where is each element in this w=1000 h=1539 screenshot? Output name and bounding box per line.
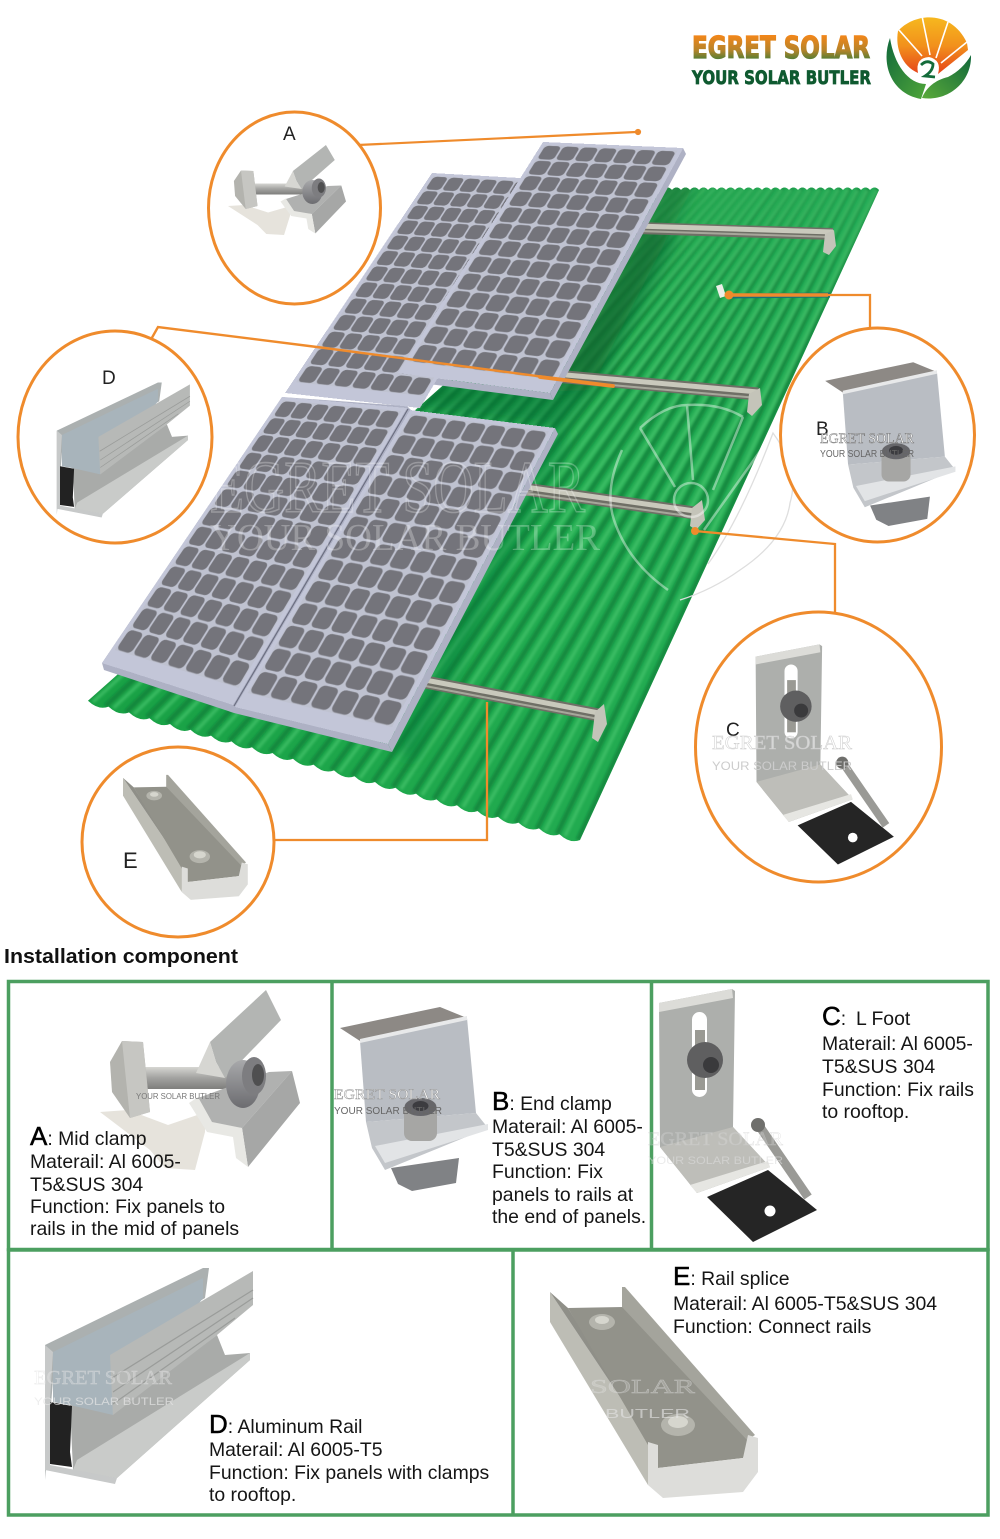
L foot text: C: (822, 1001, 846, 1031)
callout circle B: EGRET SOLAR (820, 431, 914, 447)
solar panel: lower right (235, 410, 555, 744)
watermark: emblem outline (610, 405, 773, 590)
cell B: end clamp (334, 1007, 648, 1228)
aluminum rail drawing (45, 1268, 253, 1484)
end clamp text: panels to rails at (492, 1184, 634, 1206)
L foot text: T5&SUS 304 (822, 1056, 935, 1078)
watermark: main illustration: EGRET SOLAR (210, 447, 585, 529)
rail splice watermark: SOLAR (590, 1376, 696, 1398)
leader line E (275, 702, 487, 840)
end clamp text: T5&SUS 304 (492, 1139, 605, 1161)
cell E: rail splice (550, 1261, 942, 1498)
rail 1 (636, 226, 836, 255)
cell C: L foot (648, 989, 979, 1242)
solar panel: upper left (285, 173, 520, 408)
aluminum rail text: to rooftop. (209, 1484, 296, 1506)
L foot text: L Foot (856, 1008, 911, 1030)
heading: installation component: Installation component (4, 946, 238, 968)
mid clamp watermark: YOUR SOLAR BUTLER (136, 1092, 220, 1101)
end clamp watermark (334, 1087, 442, 1117)
panel edge thickness and backing (102, 148, 686, 752)
aluminum rail watermark: EGRET SOLAR (34, 1367, 173, 1389)
end clamp watermark: EGRET SOLAR (334, 1087, 440, 1103)
callout circle E: E (123, 848, 138, 873)
leader line C (691, 527, 835, 613)
L foot watermark (648, 1129, 783, 1167)
watermark: main illustration (210, 447, 601, 559)
callout circle A: A (283, 124, 296, 145)
end clamp text: the end of panels. (492, 1206, 646, 1228)
L foot watermark: YOUR SOLAR BUTLER (648, 1155, 783, 1167)
aluminum rail text: D: Aluminum Rail (209, 1409, 362, 1439)
rail 2 (555, 374, 762, 416)
rail splice text: Materail: Al 6005-T5&SUS 304 (673, 1293, 937, 1315)
callout circle D: D (102, 368, 116, 389)
rail 4 (420, 679, 607, 742)
aluminum rail watermark: YOUR SOLAR BUTLER (34, 1396, 174, 1408)
callout circle D (18, 331, 212, 543)
watermark: emblem outline on white (680, 433, 793, 600)
callout circle B: B (816, 419, 829, 440)
cell D: aluminum rail (34, 1268, 495, 1506)
mid clamp text: T5&SUS 304 (30, 1174, 143, 1196)
L foot text: Function: Fix rails (822, 1079, 974, 1101)
leader line A (358, 129, 641, 145)
rail 3 (525, 487, 705, 530)
rail splice watermark (590, 1376, 696, 1421)
rail splice text: Function: Connect rails (673, 1316, 871, 1338)
callout circle C (696, 612, 942, 882)
callout circle A (208, 112, 380, 304)
logo wordmark (691, 31, 871, 89)
solar panel: upper right (400, 142, 683, 393)
roof with rails (88, 148, 879, 842)
callout circle B (780, 328, 974, 542)
watermark: main illustration: YOUR SOLAR BUTLER (210, 517, 601, 559)
rail splice watermark: BUTLER (605, 1406, 690, 1421)
end clamp watermark: YOUR SOLAR BUTLER (334, 1106, 442, 1117)
mid clamp drawing (100, 990, 300, 1170)
logo wordmark: YOUR SOLAR BUTLER (691, 67, 871, 89)
L foot text: to rooftop. (822, 1101, 909, 1123)
end clamp text: Materail: Al 6005- (492, 1116, 643, 1138)
mid clamp text: A: Mid clamp (30, 1121, 146, 1151)
end clamp text: Function: Fix (492, 1161, 603, 1183)
callout circle B: YOUR SOLAR BUTLER (820, 449, 914, 460)
L foot watermark: EGRET SOLAR (648, 1129, 783, 1150)
table frame (8, 981, 988, 1515)
L foot drawing (659, 989, 817, 1242)
end clamp text: B: End clamp (492, 1086, 612, 1116)
callout circle C: C (726, 720, 740, 741)
mid clamp text: Function: Fix panels to (30, 1196, 225, 1218)
leader line B (716, 284, 870, 331)
cell A: mid clamp (30, 990, 300, 1240)
logo wordmark: EGRET SOLAR (692, 31, 870, 66)
rail splice text: E: Rail splice (673, 1261, 789, 1291)
callout circle C: YOUR SOLAR BUTLER (712, 759, 852, 773)
rail splice drawing (550, 1287, 758, 1498)
end clamp drawing (340, 1007, 488, 1191)
logo (691, 16, 971, 99)
aluminum rail text: Function: Fix panels with clamps (209, 1462, 489, 1484)
leader line D (149, 327, 613, 386)
logo emblem (887, 16, 971, 99)
aluminum rail text: Materail: Al 6005-T5 (209, 1439, 383, 1461)
aluminum rail watermark (34, 1367, 174, 1408)
callout circle E (82, 747, 274, 937)
solar panel: lower left (102, 397, 407, 705)
L foot text: Materail: Al 6005- (822, 1033, 973, 1055)
mid clamp text: Materail: Al 6005- (30, 1151, 181, 1173)
mid clamp text: rails in the mid of panels (30, 1218, 239, 1240)
callout circle C: EGRET SOLAR (712, 732, 853, 754)
